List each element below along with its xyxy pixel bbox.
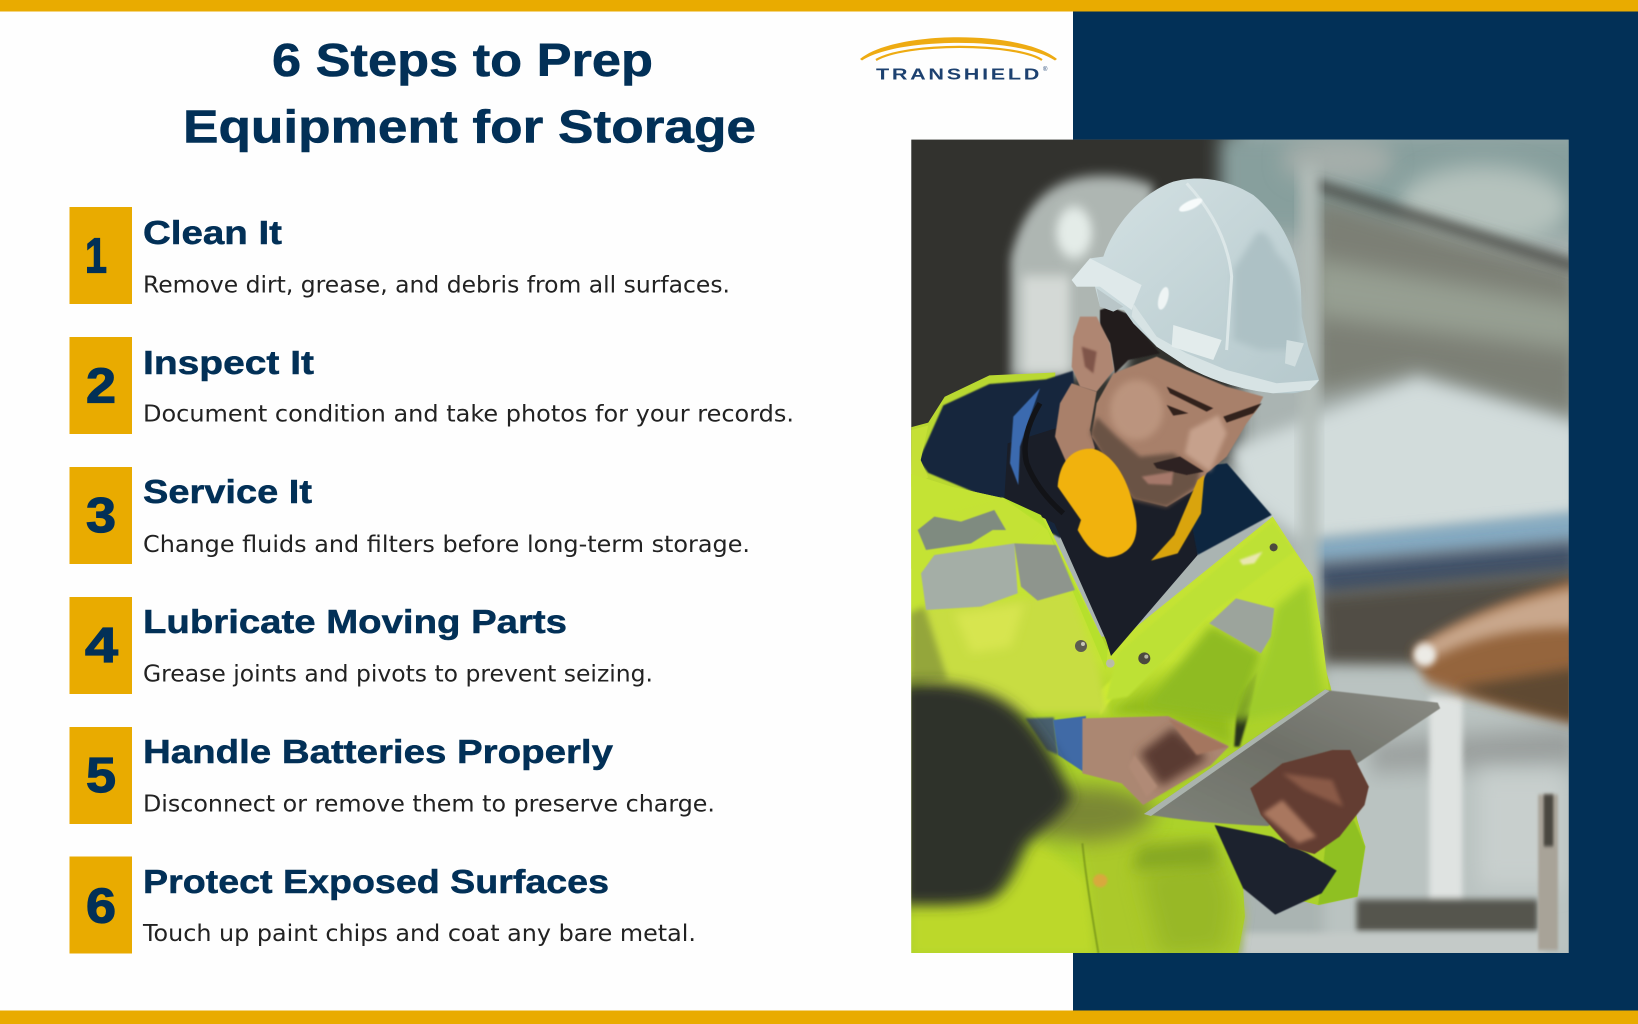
step 2 [70,337,794,434]
jacket lower body [907,637,1365,955]
number box 3 [70,467,132,564]
dark sleeve [1215,825,1337,915]
text: Disconnect: Disconnect or remove them to preserve charge. [143,792,715,818]
ear muffs [1058,449,1204,561]
number box 4 [70,597,132,694]
step 1 [70,207,730,304]
right hand [1250,750,1369,854]
number 2: 2 [86,360,116,414]
soft shadow around foreground shoulder [1011,787,1154,840]
tablet [1144,689,1440,826]
shirt [1004,427,1206,656]
text: Grease joints: Grease joints and pivots to prevent seizing. [143,662,653,688]
number box 1 [70,207,132,304]
chest shading [909,497,1324,720]
number box 2 [70,337,132,434]
logo: Transhield [860,37,1057,84]
heading: Lubricate Moving Parts: Lubricate Moving Parts [143,603,567,640]
sleeve and blue cuff [1025,716,1086,772]
bottom gold bar [0,1010,1638,1024]
step 3 [70,467,750,564]
heading: Protect Exposed Surfaces: Protect Exposed Surfaces [143,863,609,900]
title: 6 Steps to Prep [272,34,653,86]
number box 6 [70,856,132,954]
navy background panel [1073,11,1638,1011]
heading: Clean It: Clean It [143,214,282,251]
step 6 [70,856,696,954]
text: Touch up: Touch up paint chips and coat any bare metal. [142,921,696,947]
number 6: 6 [86,880,116,934]
logo: Transhield: ® [1043,66,1048,73]
arms, hands and tablet [900,683,1440,915]
reflective bands [918,510,1274,653]
number box 5 [70,727,132,824]
photo background [911,140,1569,953]
face [1092,357,1263,507]
blurred foreground shoulder [900,683,1072,905]
hard hat shell [1072,178,1319,393]
title [183,34,756,152]
top gold bar [0,0,1638,12]
blue inner collar strip [1010,388,1040,485]
text: Remove dirt: Remove dirt, grease, and debris from all surfaces. [143,272,730,298]
text: Document condition: Document condition and take photos for your records. [143,402,794,428]
step 4 [70,597,653,694]
jacket chest base [909,473,1331,707]
jacket chest, bands and shirt [909,427,1331,720]
head: face and hard hat [1010,178,1319,513]
heading: Handle Batteries Properly: Handle Batteries Properly [143,733,614,770]
number 4: 4 [85,619,118,673]
heading: Inspect It: Inspect It [143,344,314,381]
ear [1072,317,1114,392]
heading: Service It: Service It [143,473,312,510]
right navy collar [1191,463,1272,555]
logo: Transhield: TRANSHIELD [876,66,1042,84]
number 1: 1 [85,230,107,284]
left hand [1082,716,1229,805]
hair [1100,307,1160,373]
title: Equipment for Storage [183,100,756,152]
shoulder and left collar [907,371,1081,570]
neck [1055,383,1097,463]
step 5 [70,727,715,824]
photo: worker in hi-vis jacket with tablet [911,140,1569,953]
number 3: 3 [86,489,116,543]
text: Change fluids: Change fluids and filters before long-term storage. [143,532,750,558]
number 5: 5 [86,749,116,803]
jacket snaps [1075,543,1278,668]
